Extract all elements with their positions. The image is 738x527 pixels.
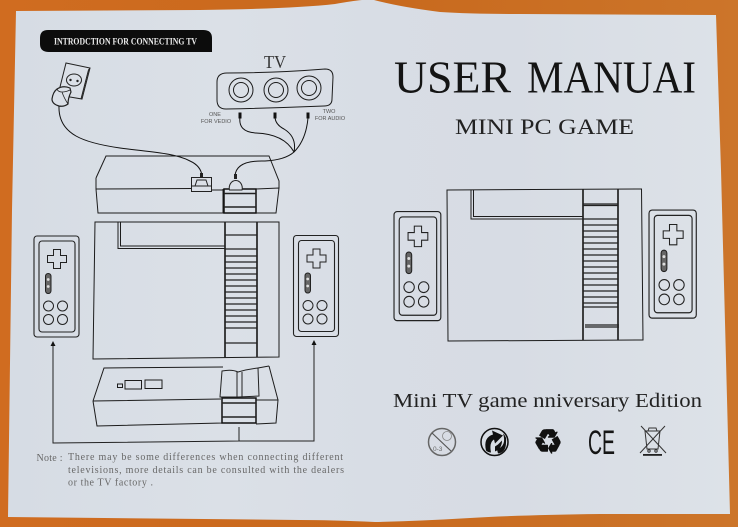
arrows to controllers: [50, 340, 316, 443]
icon: age warning 0-3: [428, 428, 456, 456]
label: two for audio: TWO: [323, 109, 336, 115]
heading badge: [40, 30, 212, 52]
note text: or the TV factory .: [68, 478, 153, 488]
controller: left: [34, 236, 79, 337]
console: top view: [447, 189, 643, 341]
title: [394, 52, 696, 102]
TV AV ports: [217, 69, 333, 109]
icon: recycling: ♻: [533, 422, 563, 461]
label: two for audio: FOR AUDIO: [315, 116, 346, 122]
AV cables: [235, 113, 309, 176]
note text: [36, 452, 344, 488]
label: one for video: FOR VEDIO: [201, 119, 232, 125]
icon: green dot: [481, 428, 508, 456]
power cable: [59, 106, 202, 176]
heading badge: INTRODCTION FOR CONNECTING TV: [54, 38, 197, 48]
subtitle: MINI PC GAME: [455, 114, 634, 139]
icon: CE mark: CE: [588, 424, 615, 462]
label: one for video: ONE: [209, 112, 221, 118]
icon: age warning 0-3: 0-3: [433, 446, 443, 453]
controller: right: [649, 210, 696, 318]
note text: There may be some differences when connecting different: [68, 452, 343, 463]
controller: left: [394, 212, 441, 321]
console: top view: [93, 222, 279, 359]
icon: wall socket and plug: [52, 63, 90, 106]
panel: connecting TV page: [34, 30, 346, 488]
console: rear view: [93, 366, 278, 426]
note text: Note :: [36, 453, 62, 464]
icon: WEEE crossed bin: [640, 426, 666, 456]
panel: cover page: [393, 52, 702, 462]
note text: televisions, more details can be consulted with the dealers: [68, 465, 344, 476]
edition line: Mini TV game nniversary Edition: [393, 390, 702, 412]
title: USER: [394, 52, 511, 102]
console: front connection view: [96, 156, 279, 213]
label: one for video: [201, 112, 232, 125]
label: two for audio: [315, 109, 346, 122]
controller: right: [294, 236, 338, 336]
title: MANUAI: [527, 52, 696, 102]
TV label: TV: [264, 52, 286, 72]
